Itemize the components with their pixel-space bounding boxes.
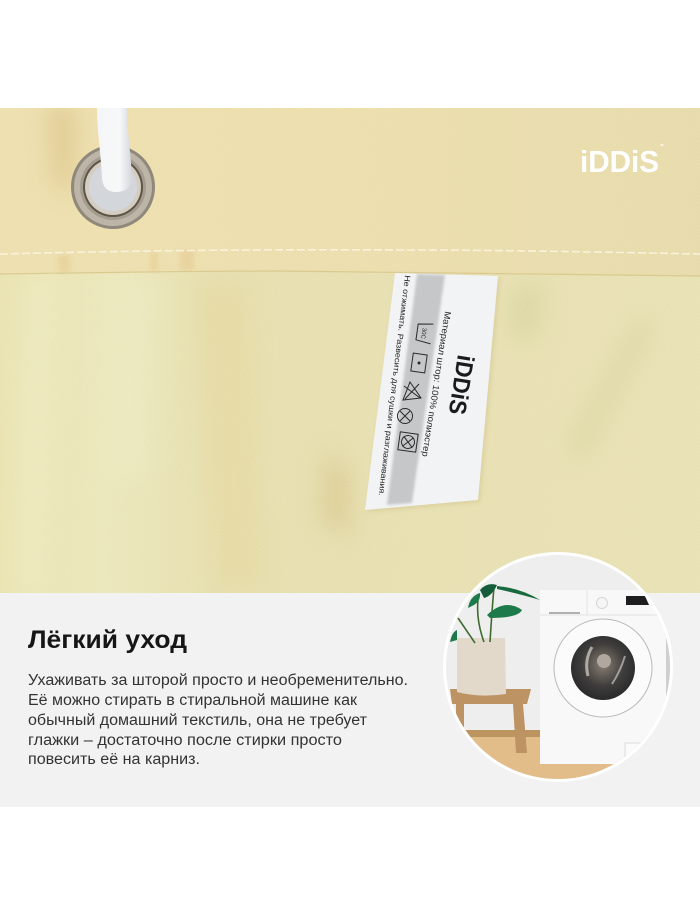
text block: description: повесить её на карниз.: [28, 751, 200, 768]
care icons: [398, 322, 433, 452]
hem seam edge: [0, 271, 700, 276]
service hatch: [624, 742, 640, 757]
photo: washing machine in circle: [440, 550, 680, 787]
label shadow: [367, 275, 500, 512]
heading: Лёгкий уход: [28, 626, 187, 654]
panel: curtain photo: [0, 108, 700, 593]
stool: [450, 689, 531, 753]
icon: grommet and rod: [71, 108, 155, 229]
fabric pot: [457, 638, 506, 696]
curtain folds: [28, 286, 629, 584]
washer body: [540, 590, 666, 764]
panel: text background: [0, 593, 700, 807]
side shadow: [664, 632, 670, 702]
text block: description: Ухаживать за шторой просто и необременительно.: [28, 672, 408, 689]
skirting: [466, 730, 540, 738]
text block: description: [28, 672, 408, 768]
room wall: [446, 555, 639, 730]
dial: [596, 598, 608, 608]
label body: [365, 273, 498, 510]
label care text: Не отжимать. Развесить для сушки и разглаживания.: [377, 275, 412, 496]
label material text: Материал штор: 100% полиэстер: [420, 311, 453, 457]
stitching: [0, 250, 700, 254]
circle border: [443, 552, 673, 782]
text block: description: глажки – достаточно после стирки просто: [28, 732, 342, 749]
text block: description: Её можно стирать в стиральной машине как: [28, 692, 357, 709]
door: [554, 619, 652, 717]
display: [626, 596, 649, 605]
fabric weave: [0, 108, 700, 593]
logo: iDDiS: iDDiS: [580, 144, 659, 179]
text block: description: обычный домашний текстиль, она не требует: [28, 712, 367, 729]
floor: [470, 737, 646, 779]
curtain lower fabric: [0, 255, 700, 593]
care icons: 30C: [419, 327, 427, 340]
label gray band: [387, 274, 445, 505]
grommet shadow: [48, 108, 75, 195]
drawer handle: [549, 612, 580, 614]
care label: [365, 273, 500, 512]
hem folds: [58, 250, 194, 273]
curtain hem band: [0, 108, 700, 276]
label logo: iDDiS: [443, 353, 479, 417]
plant: [450, 584, 540, 643]
